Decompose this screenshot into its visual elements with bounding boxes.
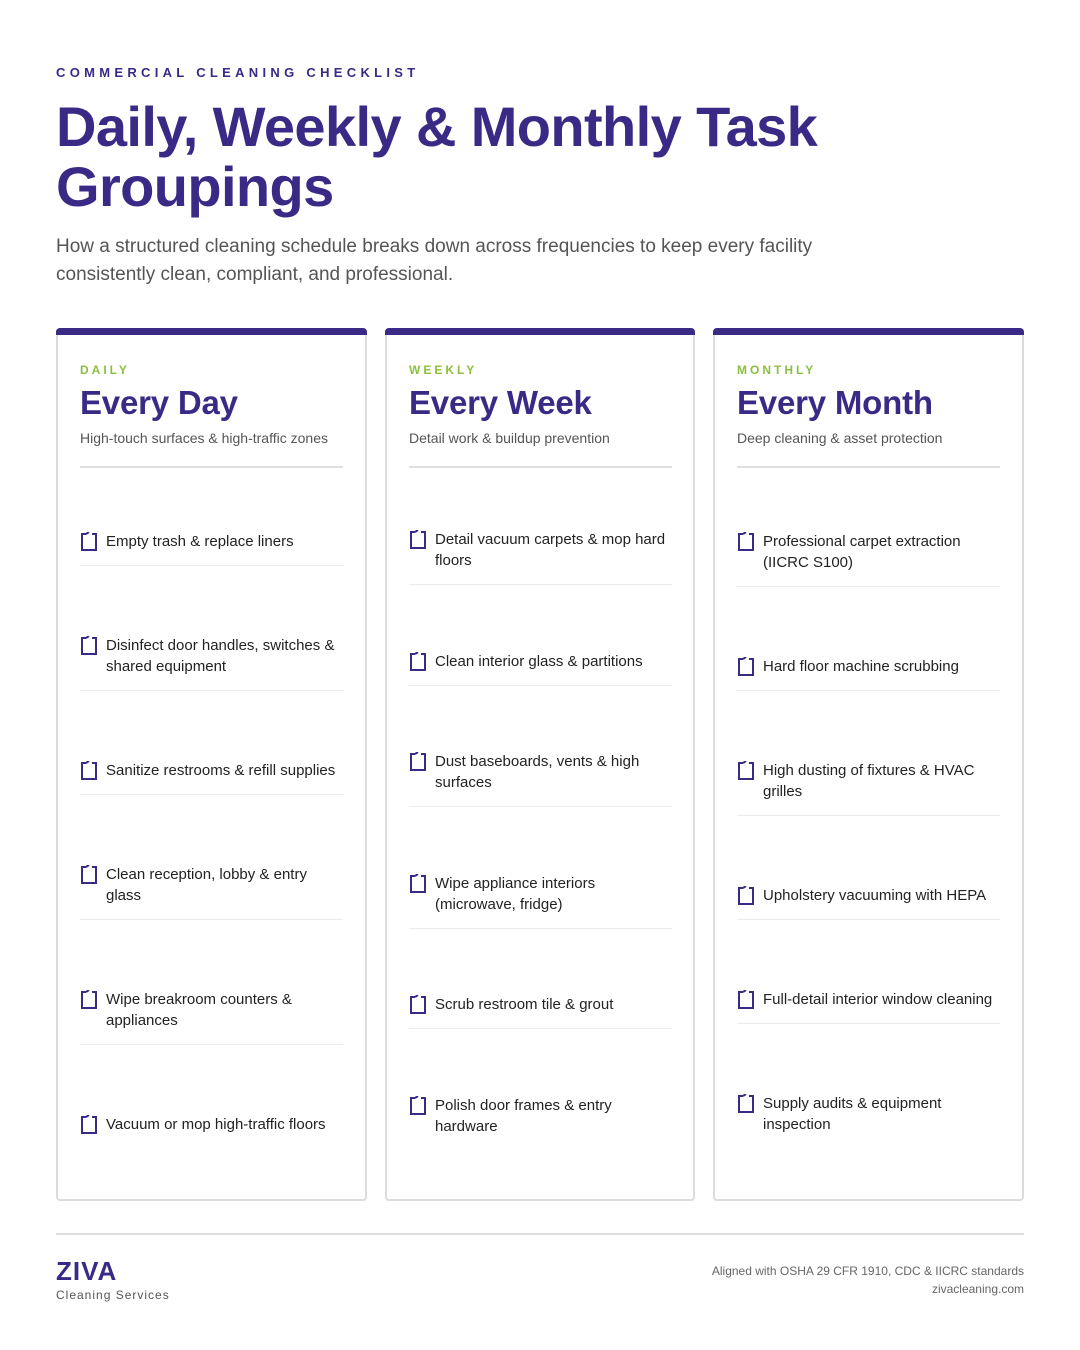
item: High dusting of fixtures & HVAC grilles (763, 762, 974, 800)
item: Clean interior glass & partitions (435, 653, 643, 670)
item: Scrub restroom tile & grout (435, 996, 613, 1013)
item: Sanitize restrooms & refill supplies (106, 762, 335, 779)
item: Upholstery vacuuming with HEPA (763, 887, 986, 904)
item: Supply audits & equipment inspection (763, 1095, 941, 1133)
footer note (712, 1264, 1024, 1296)
footer brand (56, 1256, 170, 1302)
item: Empty trash & replace liners (106, 533, 294, 550)
item: Hard floor machine scrubbing (763, 658, 959, 675)
monthly subtitle: Deep cleaning & asset protection (737, 430, 942, 446)
eyebrow: COMMERCIAL CLEANING CHECKLIST (56, 65, 420, 80)
panel: weekly (385, 328, 695, 1201)
item: Polish door frames & entry hardware (435, 1097, 612, 1135)
title: Daily, Weekly & Monthly Task Groupings (56, 95, 817, 218)
item: Wipe breakroom counters & appliances (106, 991, 292, 1029)
item: Professional carpet extraction (IICRC S100) (763, 533, 961, 571)
footer note: zivacleaning.com (932, 1282, 1024, 1296)
item: Detail vacuum carpets & mop hard floors (435, 531, 665, 569)
monthly heading: Every Month (737, 384, 933, 421)
item: Disinfect door handles, switches & shared equipment (106, 637, 334, 675)
item: Wipe appliance interiors (microwave, fridge) (435, 875, 595, 913)
item: Full-detail interior window cleaning (763, 991, 992, 1008)
subtitle: How a structured cleaning schedule breaks down across frequencies to keep every facility consistently clean, compliant, and professional. (56, 236, 812, 285)
footer note: Aligned with OSHA 29 CFR 1910, CDC & IICRC standards (712, 1264, 1024, 1278)
daily heading: Every Day (80, 384, 238, 421)
panel: monthly (713, 328, 1024, 1201)
item: Dust baseboards, vents & high surfaces (435, 753, 639, 791)
footer brand: ZIVA (56, 1256, 117, 1286)
item: Vacuum or mop high-traffic floors (106, 1116, 326, 1133)
footer brand: Cleaning Services (56, 1288, 170, 1302)
weekly heading: Every Week (409, 384, 592, 421)
weekly subtitle: Detail work & buildup prevention (409, 430, 610, 446)
panel: daily (56, 328, 367, 1201)
daily subtitle: High-touch surfaces & high-traffic zones (80, 430, 328, 446)
daily label: DAILY (80, 363, 130, 377)
item: Clean reception, lobby & entry glass (106, 866, 307, 904)
weekly label: WEEKLY (409, 363, 477, 377)
monthly label: MONTHLY (737, 363, 816, 377)
